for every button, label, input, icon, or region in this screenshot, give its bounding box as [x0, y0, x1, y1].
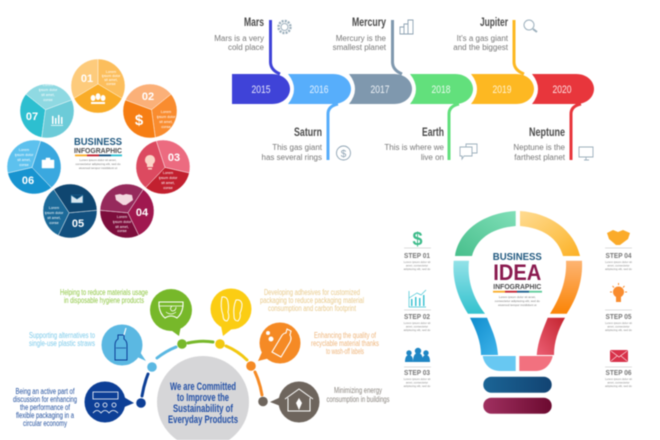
segment 06: sit amet,	[17, 158, 31, 162]
segment 2016: 2016	[310, 84, 328, 96]
icon: bar chart	[400, 20, 413, 34]
segment 07: sit amet,	[41, 93, 55, 97]
text: energy	[326, 386, 390, 404]
step 03: adipiscing elit, sed do	[404, 384, 431, 388]
bubble: recycled bottle	[258, 322, 300, 364]
central circle: Sustainability of	[173, 403, 233, 415]
text: discussion: Being an active part of	[16, 387, 75, 396]
segment 2015: 2015	[252, 84, 270, 96]
step 01: Lorem ipsum dolor sit	[404, 260, 431, 264]
step 05	[605, 283, 632, 332]
step 03: amet, consectetur	[406, 380, 428, 384]
text: straws: single-use plastic straws	[29, 339, 95, 348]
text: adhesives: Developing adhesives for customized	[264, 288, 360, 297]
central circle: We are Committed	[170, 381, 236, 393]
text: adhesives: consumption and carbon footprint	[268, 304, 357, 313]
label: Mars: cold place	[228, 43, 265, 52]
segment 02: sit amet,	[159, 120, 173, 124]
segment 05: sit amet,	[47, 216, 61, 220]
segment 05: Lorem	[49, 206, 59, 210]
text: recyclable	[311, 331, 379, 356]
segment 04: ipsum dolor	[113, 220, 132, 224]
base bar blue	[483, 377, 552, 393]
label: Earth	[384, 127, 445, 162]
text: straws: Supporting alternatives to	[29, 331, 95, 340]
segment 02: $	[135, 112, 144, 129]
text: recyclable: to wash-off labels	[326, 347, 364, 356]
label: Saturn: This gas giant	[272, 143, 323, 152]
step 04: adipiscing elit, sed do	[605, 267, 632, 271]
segment 02: ipsum dolor	[157, 115, 176, 119]
step 05: Lorem ipsum dolor sit	[605, 321, 632, 325]
icon: dollar coin: $	[341, 149, 347, 160]
text: adhesives: packaging to reduce packaging material	[260, 296, 364, 305]
step 01: adipiscing elit, sed do	[404, 267, 431, 271]
label: Mercury: smallest planet	[333, 43, 387, 52]
bulb title: Lorem ipsum dolor sit amet,	[499, 295, 536, 299]
arc nodes	[136, 339, 268, 408]
segment 01: Lorem	[106, 70, 116, 74]
step 04: Lorem ipsum dolor sit	[605, 260, 632, 264]
step 05: STEP 05	[606, 312, 632, 321]
segment 2017	[349, 74, 412, 104]
segment 01: ipsum dolor	[102, 74, 121, 78]
step 04: STEP 04	[606, 251, 632, 260]
text: recyclable: Enhancing the quality of	[314, 331, 377, 340]
segment 07: Lorem	[43, 83, 53, 87]
segment 2020	[532, 74, 594, 104]
segment 07: conse	[43, 98, 53, 102]
segment 04: sit amet,	[115, 225, 129, 229]
step 06: STEP 06	[606, 368, 632, 377]
bulb bottom left	[483, 356, 516, 371]
wheel centre title: consectetur adipiscing elit, sed do	[75, 162, 121, 166]
step 03: Lorem ipsum dolor sit	[404, 377, 431, 381]
bubble: diaper	[150, 289, 192, 336]
label: Mars: Mars is a very	[214, 34, 264, 43]
segment 06: ipsum dolor	[15, 153, 34, 157]
segment 05: 05	[72, 218, 84, 230]
segment 05: ipsum dolor	[45, 211, 64, 215]
bulb top right	[520, 211, 580, 256]
segment 04: 04	[136, 207, 149, 219]
segment 02: 02	[142, 91, 154, 103]
wheel centre title: BUSINESS	[74, 137, 122, 148]
segment 01: sit amet,	[104, 78, 118, 82]
segment 01: 01	[81, 73, 93, 85]
segment 03: conse	[163, 186, 173, 190]
step 06: adipiscing elit, sed do	[605, 384, 632, 388]
bubble: footprints	[210, 288, 252, 336]
bulb title: eiusmod tempor incididunt ut	[498, 303, 537, 307]
segment 03	[131, 135, 195, 199]
step 04: amet, consectetur	[607, 264, 630, 268]
text: hygiene	[60, 288, 148, 305]
segment 2019: 2019	[492, 84, 512, 96]
segment 06: Lorem	[19, 148, 29, 152]
step 05: adipiscing elit, sed do	[605, 328, 632, 332]
text: discussion: the performance of	[20, 403, 71, 412]
label: Earth: Earth	[422, 127, 444, 139]
segment 03: 03	[168, 152, 180, 164]
segment 07	[9, 73, 85, 149]
segment 01: conse	[106, 82, 116, 86]
label: Earth: This is where we	[384, 143, 445, 152]
label: Neptune: Neptune is the	[513, 143, 566, 152]
step 02: adipiscing elit, sed do	[404, 328, 431, 332]
bulb title: IDEA	[493, 260, 541, 285]
central circle: Everyday Products	[168, 414, 238, 426]
segment 2019	[471, 74, 534, 104]
segment 04: conse	[117, 229, 127, 233]
segment 05	[34, 175, 106, 247]
label: Jupiter	[453, 17, 509, 52]
step 02: amet, consectetur	[406, 324, 428, 328]
label: Neptune: Neptune	[529, 127, 565, 139]
wheel centre title: eiusmod tempor incididunt ut	[79, 166, 117, 170]
icon: dollar coin	[336, 146, 350, 160]
text: adhesives	[260, 288, 364, 313]
bulb title: consectetur adipiscing elit, sed do	[495, 299, 540, 303]
label: Jupiter: It's a gas giant	[457, 34, 509, 43]
text: straws	[29, 331, 95, 348]
bulb title	[493, 251, 542, 307]
label: Mars: Mars	[244, 17, 264, 29]
segment 03: Lorem	[163, 171, 173, 175]
arc path	[142, 341, 262, 396]
wheel centre title	[74, 137, 123, 170]
step 02: STEP 02	[404, 312, 430, 321]
bubble: energy house	[270, 382, 320, 422]
step 01: amet, consectetur	[406, 264, 428, 268]
central circle	[157, 356, 249, 440]
text: discussion: flexible packaging in a	[16, 411, 74, 420]
label: Mercury: Mercury is the	[336, 34, 387, 43]
panel: business wheel infographic	[2, 59, 195, 247]
segment 05: conse	[49, 221, 59, 225]
segment 2016	[288, 74, 351, 104]
segment 2020: 2020	[552, 84, 572, 96]
text: discussion	[13, 387, 77, 428]
label: Saturn: has several rings	[262, 153, 322, 162]
label: Saturn: Saturn	[294, 127, 322, 139]
step 05: amet, consectetur	[607, 324, 630, 328]
bulb top left	[455, 211, 516, 256]
panel: sustainability commitment	[13, 288, 390, 440]
segment 04	[91, 175, 163, 247]
segment 06	[2, 135, 66, 199]
text: discussion: discussion for enhancing	[13, 395, 77, 404]
text: recyclable: recyclable material thanks	[311, 339, 379, 348]
base bar maroon	[483, 398, 552, 414]
step 01: STEP 01	[404, 251, 430, 260]
segment 2018	[410, 74, 473, 104]
icon: magnifier	[524, 20, 537, 32]
step 06: Lorem ipsum dolor sit	[605, 377, 632, 381]
segment 02	[112, 73, 188, 149]
text: discussion: circular economy	[23, 419, 67, 428]
step 02	[404, 290, 431, 332]
segment 07: ipsum dolor	[39, 88, 58, 92]
icon: chat bubbles	[460, 144, 477, 159]
step 06	[605, 350, 632, 388]
segment 03: ipsum dolor	[159, 176, 178, 180]
label: Jupiter: and the biggest	[453, 43, 509, 52]
label: Saturn	[262, 127, 323, 162]
bulb title: BUSINESS	[493, 251, 542, 263]
segment 06: conse	[19, 163, 29, 167]
segment 01	[71, 59, 125, 113]
segment 02: Lorem	[161, 110, 171, 114]
text: hygiene: in disposable hygiene products	[64, 296, 144, 305]
label: Mercury	[333, 17, 387, 52]
bulb lower left	[470, 318, 498, 355]
text: energy: Minimizing energy	[334, 386, 382, 395]
step 01: $	[412, 229, 423, 249]
text: hygiene: Helping to reduce materials usage	[60, 288, 148, 297]
step 03	[404, 348, 431, 388]
step 06: amet, consectetur	[607, 380, 630, 384]
bubble: bottle	[102, 324, 146, 366]
label: Mercury: Mercury	[352, 17, 386, 29]
segment 2018: 2018	[432, 84, 450, 96]
step 02: Lorem ipsum dolor sit	[404, 321, 431, 325]
segment 06: 06	[22, 175, 34, 187]
bulb mid right	[550, 261, 582, 314]
label: Mars	[214, 17, 265, 52]
wheel centre title: Lorem ipsum dolor sit amet,	[79, 158, 117, 162]
bulb title: INFOGRAPHIC	[493, 284, 541, 291]
bubble: people discussion	[84, 382, 134, 422]
stems	[270, 20, 581, 160]
text: energy: consumption in buildings	[326, 395, 390, 404]
panel: business idea lightbulb	[404, 211, 632, 414]
icon: monitor	[579, 147, 593, 160]
wheel centre title: INFOGRAPHIC	[74, 146, 123, 155]
step 04	[605, 230, 632, 271]
segment 2017: 2017	[370, 84, 390, 96]
label: Neptune: farthest planet	[514, 153, 566, 162]
icon: gear	[278, 21, 290, 33]
segment 03: sit amet,	[161, 181, 175, 185]
label: Jupiter: Jupiter	[480, 17, 508, 29]
segment 04: Lorem	[117, 215, 127, 219]
bulb bottom right	[519, 356, 553, 371]
panel: planet timeline	[214, 17, 594, 162]
segment 02: conse	[161, 125, 171, 129]
label: Neptune	[513, 127, 566, 162]
segment 07: 07	[26, 111, 38, 123]
step 01	[404, 229, 431, 271]
segment 2015	[232, 74, 290, 104]
bulb mid left	[453, 261, 485, 314]
step 03: STEP 03	[404, 368, 430, 377]
bulb lower right	[537, 318, 565, 355]
label: Earth: live on	[421, 153, 444, 162]
central circle: to Improve the	[177, 392, 229, 404]
